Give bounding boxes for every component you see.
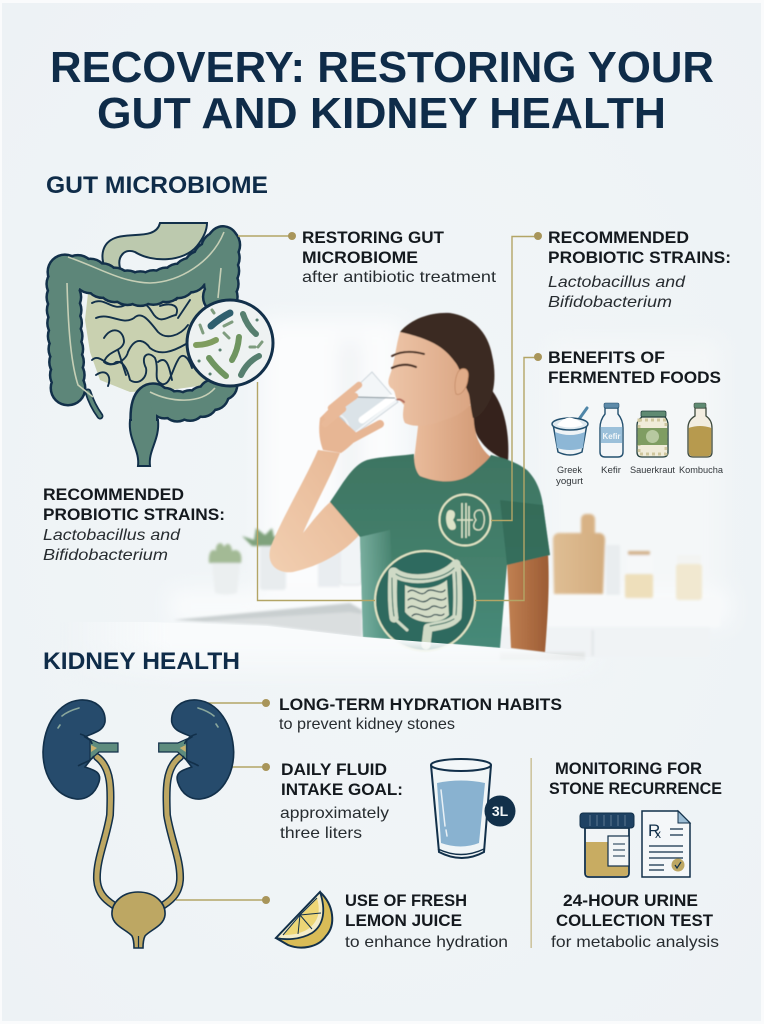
- text block: recommended probiotic strains right: Lactobacillus and: [548, 274, 686, 291]
- ear: [455, 369, 468, 394]
- icon: kefir bottle: [600, 403, 623, 476]
- text block: monitoring: STONE RECURRENCE: [549, 779, 722, 798]
- icon: kefir bottle: Kefir: [602, 431, 621, 441]
- raised arm: [270, 450, 360, 572]
- front counter: [146, 622, 577, 660]
- text block: recommended probiotic strains left: RECOMMENDED: [43, 485, 184, 504]
- text block: daily fluid intake: DAILY FLUID: [281, 760, 387, 779]
- text block: daily fluid intake: INTAKE GOAL:: [281, 780, 403, 799]
- appendix: [88, 392, 100, 416]
- text block: benefits of fermented foods: BENEFITS OF: [548, 348, 665, 367]
- t-shirt: [330, 454, 550, 648]
- colon highlight stripes: [67, 232, 224, 400]
- plants: [209, 528, 362, 594]
- icon: water glass 3L: [431, 759, 516, 858]
- text block: recommended probiotic strains left: Bifidobacterium: [43, 547, 168, 564]
- text block: recommended probiotic strains right: PROBIOTIC STRAINS:: [548, 248, 731, 267]
- photo: kitchen background: [170, 320, 730, 660]
- text block: monitoring: MONITORING FOR: [555, 759, 702, 778]
- text block: recommended probiotic strains right: Bifidobacterium: [548, 294, 672, 311]
- photo: woman drinking water: [270, 313, 550, 652]
- icon: urine cup: [580, 813, 634, 877]
- illustration: digestive system: [64, 223, 224, 466]
- text block: benefits of fermented foods: FERMENTED FOODS: [548, 368, 721, 387]
- small intestine: [85, 285, 205, 392]
- icon: greek yogurt: [552, 408, 588, 487]
- connector lines: [176, 236, 538, 900]
- connector dots: [262, 232, 542, 904]
- text block: 24-hour test: COLLECTION TEST: [556, 911, 714, 930]
- text block: recommended probiotic strains left: [43, 485, 225, 564]
- ureters: [97, 757, 180, 908]
- text block: long-term hydration: LONG-TERM HYDRATION HABITS: [279, 695, 562, 714]
- colon: [64, 241, 223, 425]
- hair: [400, 313, 494, 418]
- text block: 24-hour test: for metabolic analysis: [551, 934, 719, 951]
- text block: recommended probiotic strains left: PROBIOTIC STRAINS:: [43, 505, 225, 524]
- icon: lemon wedge: [276, 892, 332, 948]
- text block: lemon juice: to enhance hydration: [345, 934, 508, 951]
- icon: prescription document: R: [648, 821, 660, 840]
- bladder: [112, 892, 165, 948]
- text block: lemon juice: USE OF FRESH: [345, 891, 467, 910]
- illustration: urinary system: [43, 700, 234, 948]
- icon: kefir bottle: Kefir: [601, 465, 621, 476]
- text block: 24-hour test: 24-HOUR URINE: [563, 891, 698, 910]
- text block: daily fluid intake: approximately: [280, 805, 389, 822]
- magnifier: gut bacteria: [187, 300, 273, 386]
- right arm: [507, 553, 549, 652]
- text block: long-term hydration: [279, 695, 562, 733]
- heading: kidney health: KIDNEY HEALTH: [43, 648, 240, 675]
- back counter and cabinets: [173, 597, 720, 660]
- divider: [530, 758, 532, 948]
- icon: greek yogurt: Greek: [557, 465, 582, 476]
- hand: [319, 385, 380, 453]
- gut badge on shirt: [375, 551, 475, 651]
- text block: lemon juice: [345, 891, 508, 951]
- text block: 24-hour test: [551, 891, 719, 951]
- neck: [414, 405, 492, 492]
- text block: daily fluid intake: three liters: [280, 825, 362, 842]
- kidney hilum lines: [78, 734, 199, 766]
- right kidney: [172, 700, 234, 799]
- text block: restoring gut microbiome: after antibiotic treatment: [302, 269, 497, 286]
- title: GUT AND KIDNEY HEALTH: [97, 89, 666, 138]
- ponytail: [474, 388, 508, 462]
- icon: water glass 3L: 3L: [492, 803, 509, 819]
- text block: recommended probiotic strains right: [548, 228, 731, 311]
- text block: long-term hydration: to prevent kidney stones: [279, 716, 455, 733]
- text block: lemon juice: LEMON JUICE: [345, 911, 462, 930]
- heading: gut microbiome: GUT MICROBIOME: [46, 172, 268, 199]
- text block: restoring gut microbiome: RESTORING GUT: [302, 228, 445, 247]
- text block: restoring gut microbiome: MICROBIOME: [302, 248, 418, 267]
- text block: benefits of fermented foods: [548, 348, 721, 387]
- kidney badge on shirt: [440, 494, 490, 546]
- eye, brow and lips: [392, 352, 424, 402]
- icon: prescription document: x: [655, 827, 661, 841]
- left kidney: [43, 700, 105, 799]
- stomach: [102, 223, 207, 268]
- icon: greek yogurt: yogurt: [556, 476, 583, 487]
- icon: kombucha bottle: [679, 403, 724, 476]
- renal vessels: [90, 739, 118, 760]
- text block: recommended probiotic strains left: Lactobacillus and: [43, 527, 181, 544]
- icon: sauerkraut jar: Sauerkraut: [630, 465, 675, 476]
- title: RECOVERY: RESTORING YOUR: [50, 43, 714, 92]
- text block: monitoring: [549, 759, 722, 798]
- rectum: [130, 420, 158, 466]
- cutting board and jars: [553, 514, 702, 600]
- icon: prescription document: [642, 811, 690, 877]
- text block: restoring gut microbiome: [302, 228, 497, 286]
- text block: recommended probiotic strains right: RECOMMENDED: [548, 228, 689, 247]
- kidney highlights: [58, 708, 218, 728]
- icon: sauerkraut jar: [630, 411, 675, 476]
- title: [50, 43, 714, 138]
- face: [388, 325, 478, 426]
- glass: [323, 372, 398, 441]
- text block: daily fluid intake: [280, 760, 403, 842]
- icon: kombucha bottle: Kombucha: [679, 465, 724, 476]
